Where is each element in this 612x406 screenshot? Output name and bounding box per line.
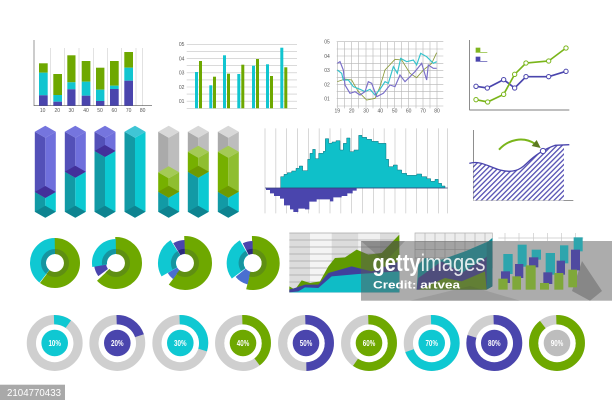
bar 50 (96, 68, 104, 106)
axis labels (40, 108, 146, 114)
green layer (418, 271, 487, 290)
watermark credit: Credit: artvea (373, 280, 461, 292)
image id tag (0, 385, 65, 400)
axis labels: 60 (406, 108, 412, 114)
hatched area (473, 145, 564, 200)
olive line (337, 53, 437, 100)
image id tag: 2104770433 (7, 388, 62, 399)
axis labels: 30 (363, 108, 369, 114)
bar 30 (67, 55, 76, 106)
bar 70 (124, 52, 133, 106)
purple layer (289, 261, 399, 292)
curve (469, 145, 569, 171)
isometric column 5 (158, 126, 179, 218)
arrow (499, 140, 541, 150)
green series (474, 46, 568, 104)
layered area chart (289, 233, 399, 292)
teal layer (289, 271, 399, 292)
axis labels: 04 (324, 54, 330, 60)
axis labels: 80 (140, 108, 146, 114)
purple columns (501, 250, 580, 284)
3D column chart (498, 237, 583, 290)
progress ring 10%: 10% (48, 338, 61, 348)
progress ring 30%: 30% (174, 338, 187, 348)
blue series (474, 69, 568, 90)
value labels (179, 42, 185, 105)
green columns (498, 265, 577, 290)
axis labels: 70 (420, 108, 426, 114)
teal layer (417, 238, 492, 290)
watermark band (361, 241, 612, 301)
teal columns (503, 237, 583, 275)
progress ring 30% (157, 320, 204, 366)
progress ring 50% (283, 320, 329, 366)
isometric column 7 (218, 126, 239, 218)
progress ring 80%: 80% (488, 338, 501, 348)
teal bars (195, 48, 283, 108)
value labels: 04 (179, 56, 185, 62)
axis labels: 19 (335, 108, 340, 114)
donut chart 2 (94, 241, 138, 285)
line chart with markers (470, 40, 569, 110)
bar 20 (53, 74, 62, 106)
negative area (266, 188, 357, 212)
axis labels: 40 (83, 108, 89, 114)
axis labels: 20 (349, 108, 355, 114)
isometric column 6 (188, 126, 209, 218)
side face (487, 238, 492, 290)
isometric column 2 (65, 126, 86, 218)
green bars (199, 59, 287, 108)
axis labels: 01 (324, 96, 330, 102)
axis labels: 80 (434, 108, 440, 114)
axis labels: 30 (69, 108, 74, 114)
bar 40 (82, 61, 90, 106)
progress ring 40% (220, 320, 266, 366)
legend (476, 48, 487, 61)
axis labels: 50 (392, 108, 398, 114)
axis labels: 60 (112, 108, 117, 114)
isometric column 3 (94, 126, 116, 218)
axis labels: 03 (324, 68, 330, 74)
purple line (337, 62, 437, 97)
bar 60 (110, 61, 119, 106)
progress ring 10% (31, 320, 78, 366)
progress ring 90%: 90% (551, 338, 564, 348)
multi line chart (324, 40, 443, 114)
axis labels: 70 (126, 108, 132, 114)
progress ring 90% (534, 320, 580, 366)
value labels: 02 (179, 85, 185, 91)
bar 10 (39, 63, 48, 106)
value labels: 05 (179, 42, 185, 48)
axis labels: 05 (324, 40, 330, 46)
value labels: 03 (179, 70, 185, 76)
axis labels: 40 (378, 108, 383, 114)
progress ring 20% (94, 320, 141, 366)
progress ring 70% (408, 320, 455, 366)
progress ring 70%: 70% (425, 338, 438, 348)
donut chart 1 (31, 239, 79, 287)
axis labels: 20 (55, 108, 60, 114)
stacked bar chart (34, 40, 152, 114)
progress ring 80% (471, 320, 518, 366)
donut chart 4 (228, 239, 277, 287)
axis labels: 02 (324, 82, 330, 88)
marker (540, 148, 546, 154)
stepped area chart (265, 128, 448, 213)
grouped bar chart (179, 42, 297, 108)
hatched curve chart (469, 130, 573, 200)
isometric column 4 (124, 126, 146, 218)
grid behind 3D columns (498, 233, 583, 241)
perspective area chart (415, 233, 492, 290)
purple layer (417, 251, 492, 290)
positive area (281, 135, 445, 188)
value labels: 01 (179, 99, 185, 105)
donut chart 3 (161, 239, 209, 287)
axis labels (324, 40, 440, 114)
progress ring 60%: 60% (363, 338, 376, 348)
axis labels: 50 (97, 108, 103, 114)
progress ring 20%: 20% (111, 338, 124, 348)
green layer (289, 235, 399, 292)
axis labels: 10 (40, 108, 46, 114)
teal line (337, 53, 437, 95)
progress ring 40%: 40% (237, 338, 250, 348)
progress ring 50%: 50% (300, 338, 313, 348)
watermark logo: gettyimages (372, 250, 486, 277)
isometric column 1 (35, 126, 56, 218)
progress ring 60% (346, 320, 392, 366)
